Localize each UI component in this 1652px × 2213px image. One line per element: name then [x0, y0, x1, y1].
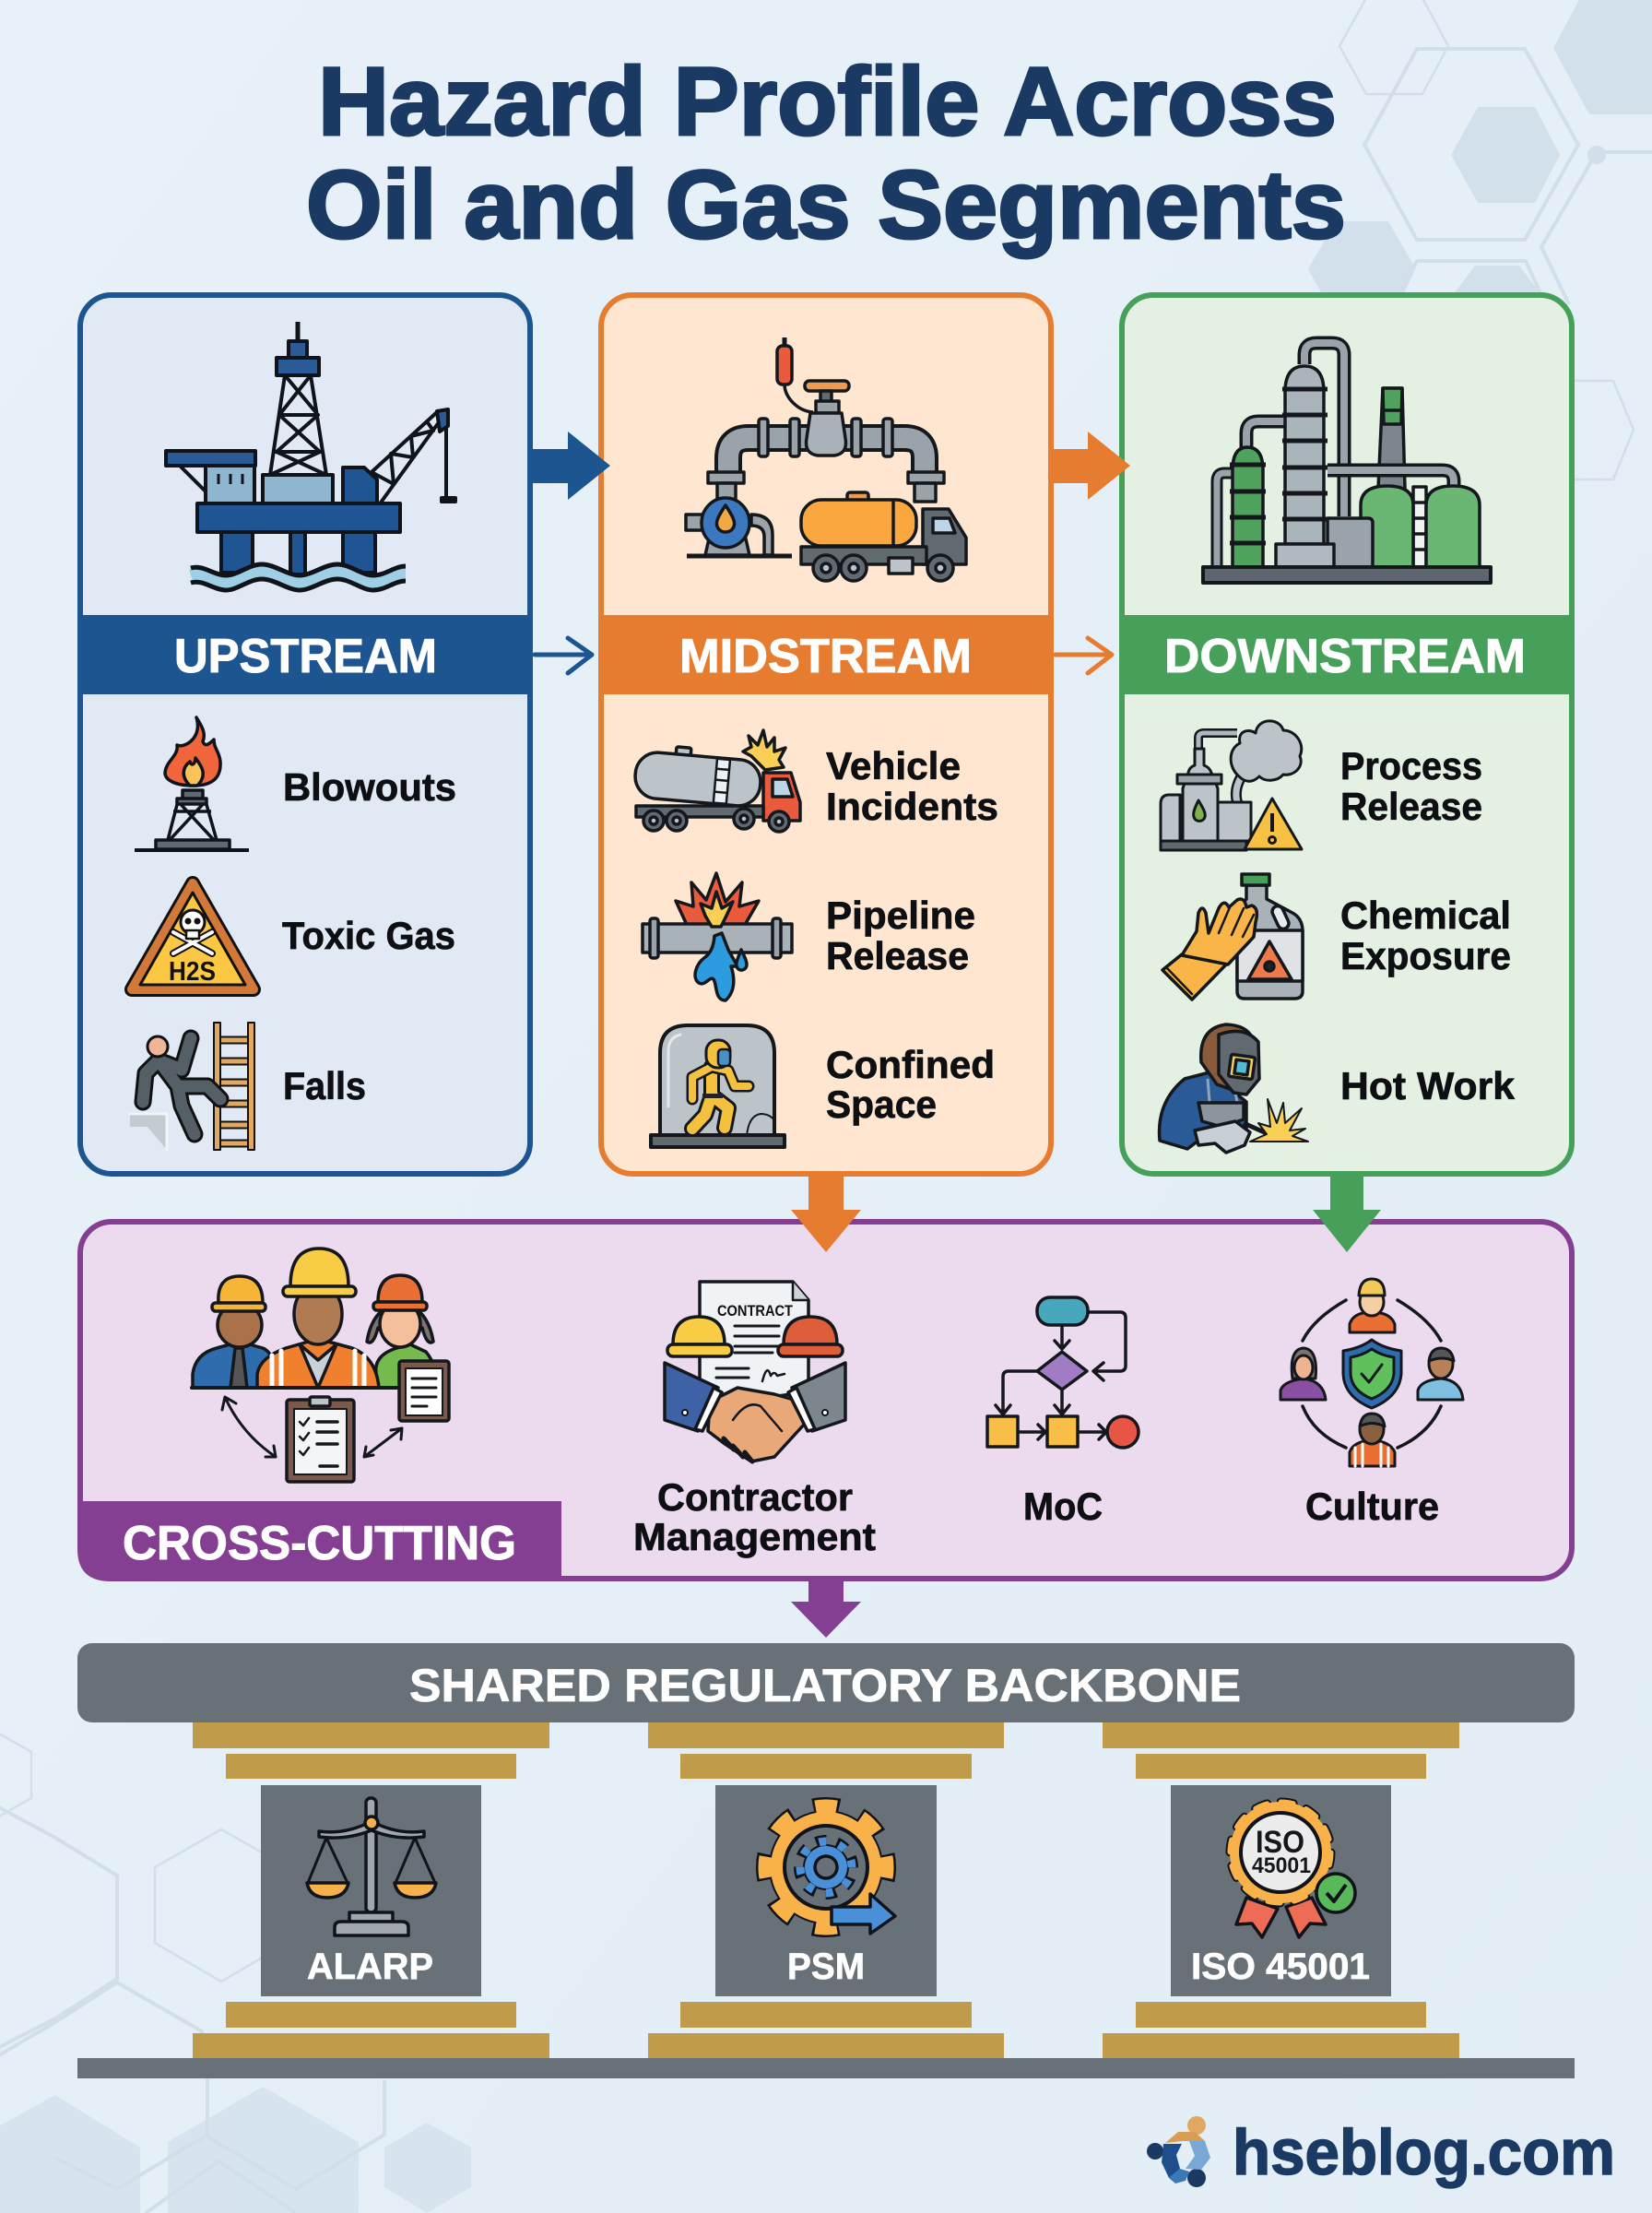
icon: contract handshake — [665, 1282, 845, 1462]
icon: chemical exposure — [1162, 874, 1303, 1000]
label: hot work: Hot Work — [1340, 1064, 1516, 1107]
arrow: thin upstream to midstream — [535, 638, 592, 673]
icon: toxic gas warning: H2S — [169, 957, 216, 987]
title: Hazard Profile Across — [318, 48, 1337, 156]
icon: blowout flame — [135, 717, 249, 850]
label: alarp: ALARP — [307, 1947, 433, 1987]
label: process release: Release — [1340, 785, 1482, 828]
label: chemical exposure: Chemical — [1340, 893, 1511, 937]
label: website: hseblog.com — [1233, 2116, 1615, 2188]
label: process release: Process — [1340, 744, 1482, 787]
panel: upstream — [77, 295, 533, 1174]
title — [306, 48, 1346, 259]
arrow: upstream to midstream — [533, 432, 610, 500]
heading: upstream: UPSTREAM — [174, 630, 437, 683]
label: contractor management: Management — [633, 1515, 876, 1558]
label: contractor management: Contractor — [657, 1475, 853, 1519]
label: pipeline release: Pipeline — [826, 893, 975, 937]
label: chemical exposure: Exposure — [1340, 934, 1511, 977]
arrow: thin midstream to downstream — [1056, 638, 1112, 673]
regulatory backbone — [77, 1643, 1575, 2078]
icon: contract handshake: CONTRACT — [717, 1302, 794, 1320]
icon: scales — [307, 1798, 436, 1935]
label: confined space — [826, 1043, 995, 1126]
icon: pipeline and tanker — [686, 337, 966, 581]
label: confined space: Confined — [826, 1043, 995, 1086]
icon: change flowchart — [987, 1297, 1139, 1448]
icon: iso certification badge: ISO — [1256, 1825, 1304, 1860]
icon: toxic gas warning — [132, 883, 254, 989]
arrow: cross-cutting to regulatory backbone — [791, 1581, 861, 1638]
label: vehicle incidents — [826, 744, 998, 828]
label: confined space: Space — [826, 1083, 937, 1126]
icon: tanker accident — [633, 730, 800, 832]
icon: fall from ladder — [130, 1023, 254, 1150]
panel: midstream — [598, 295, 1054, 1174]
icon: welder — [1160, 1024, 1308, 1153]
panel: cross-cutting — [77, 1222, 1572, 1581]
arrow: downstream to cross-cutting — [1313, 1177, 1381, 1252]
icon: logo mark — [1147, 2116, 1210, 2187]
icon: confined space — [651, 1025, 785, 1147]
label: pipeline release — [826, 893, 975, 977]
label: moc: MoC — [1023, 1485, 1103, 1528]
icon: safety culture ring — [1280, 1279, 1463, 1466]
icon: process release — [1161, 721, 1302, 850]
arrow: midstream to cross-cutting — [791, 1177, 861, 1252]
label: chemical exposure — [1340, 893, 1511, 977]
icon: workers with checklists — [192, 1249, 449, 1482]
arrow: midstream to downstream — [1054, 432, 1130, 500]
logo: hseblog.com — [1147, 2116, 1615, 2188]
label: toxic gas: Toxic Gas — [282, 914, 455, 957]
label: culture: Culture — [1305, 1485, 1439, 1528]
pillar: iso 45001 — [1103, 1722, 1459, 2058]
icon: refinery — [1203, 343, 1491, 583]
label: pipeline release: Release — [826, 934, 969, 977]
icon: iso certification badge — [1230, 1802, 1355, 1937]
label: process release — [1340, 744, 1482, 828]
icon: pipeline release — [643, 873, 792, 1000]
icon: offshore oil rig — [166, 322, 455, 590]
heading: midstream: MIDSTREAM — [679, 630, 972, 683]
label: psm: PSM — [787, 1947, 865, 1987]
heading: shared regulatory backbone: SHARED REGULATORY BACKBONE — [409, 1660, 1241, 1711]
panel: downstream — [1119, 295, 1575, 1174]
label: iso 45001: ISO 45001 — [1191, 1947, 1370, 1987]
icon: iso certification badge: 45001 — [1252, 1853, 1311, 1878]
label: blowouts: Blowouts — [283, 765, 456, 809]
label: falls: Falls — [283, 1064, 366, 1107]
icon: process safety gear — [754, 1795, 898, 1939]
pillar: psm — [648, 1722, 1004, 2058]
title: Oil and Gas Segments — [306, 151, 1346, 259]
pillar: alarp — [193, 1722, 549, 2058]
label: vehicle incidents: Vehicle — [826, 744, 961, 787]
heading: downstream: DOWNSTREAM — [1164, 630, 1526, 683]
label: contractor management — [633, 1475, 876, 1558]
heading: cross-cutting: CROSS-CUTTING — [123, 1517, 516, 1570]
label: vehicle incidents: Incidents — [826, 785, 998, 828]
